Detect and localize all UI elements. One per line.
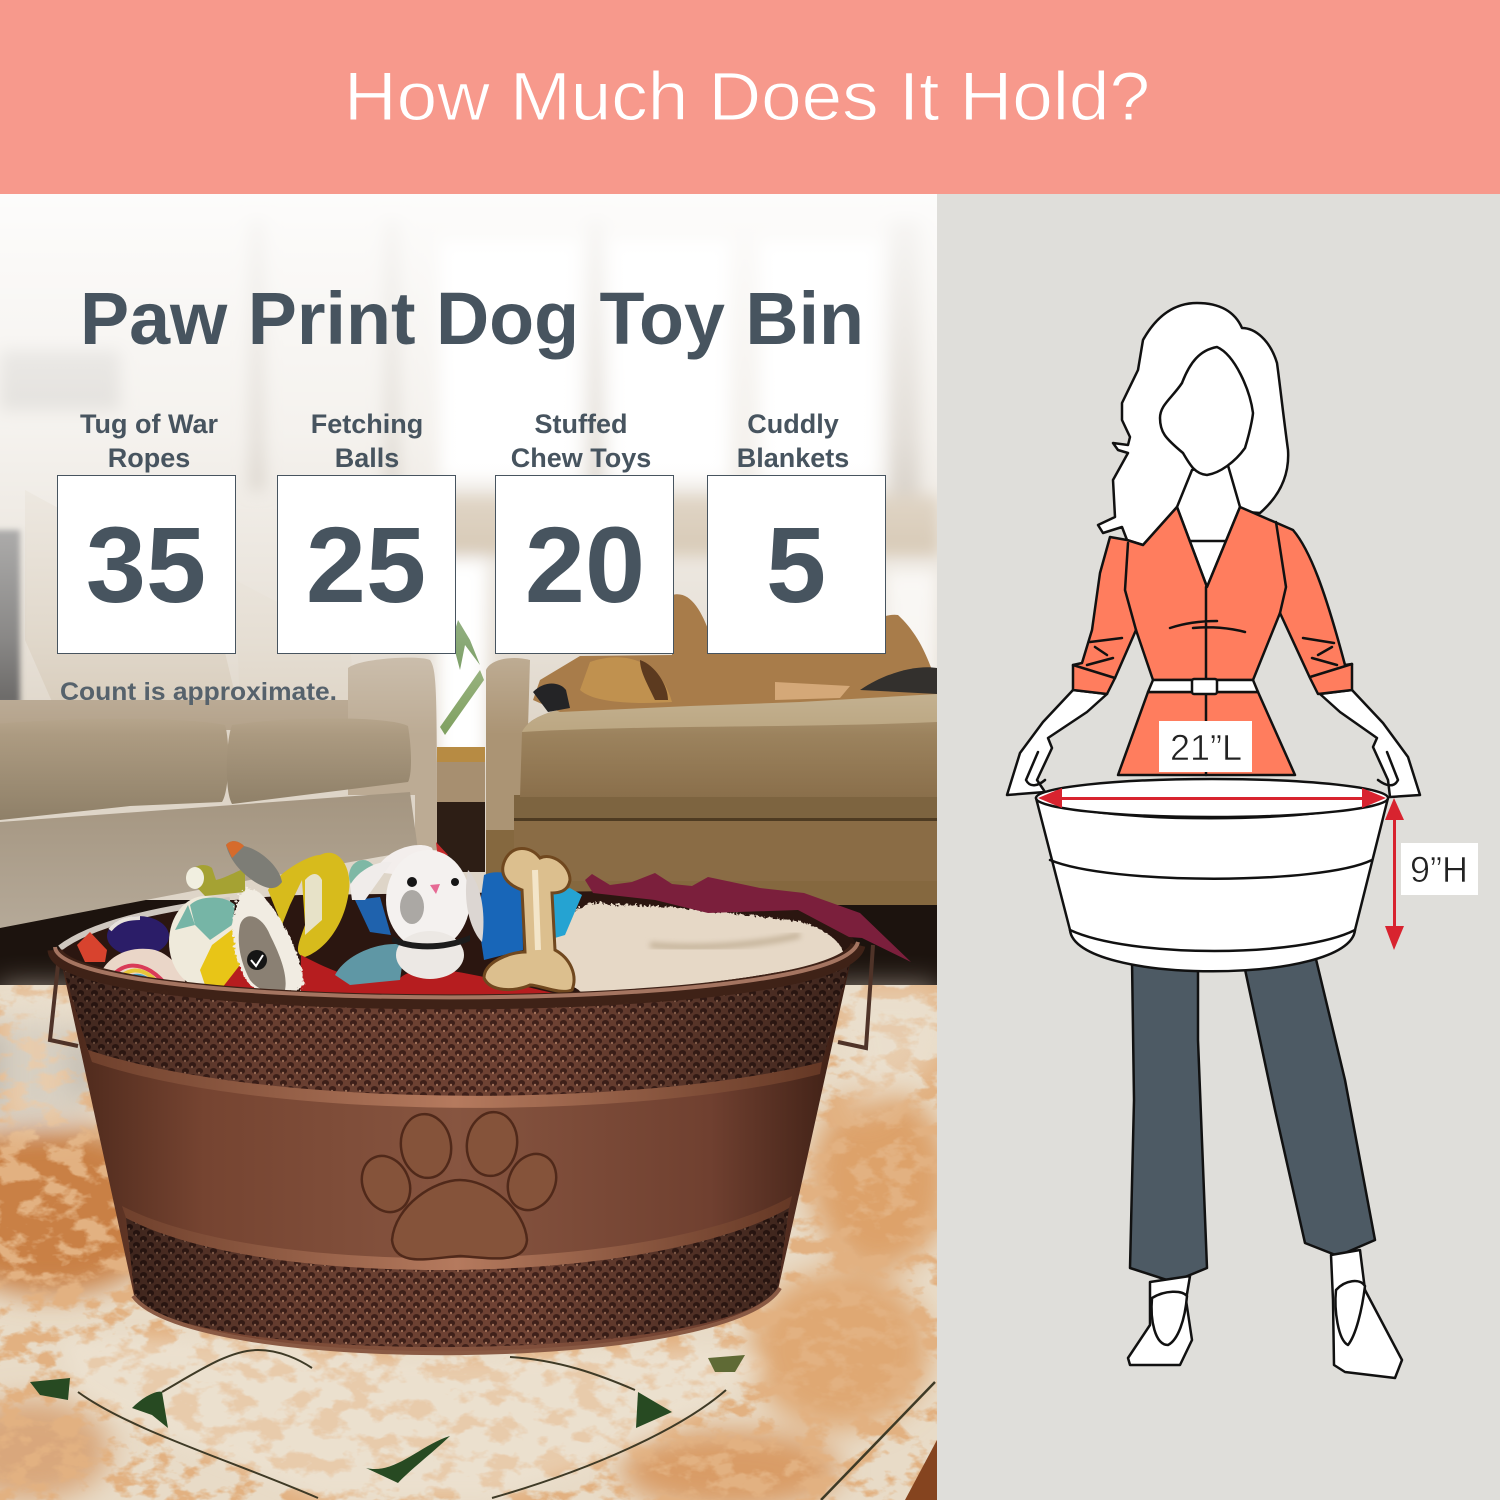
rug leaves	[30, 1355, 745, 1483]
stat: tug of war ropes: Ropes	[108, 443, 190, 473]
small balls	[77, 932, 107, 962]
white haze over the upper photo	[0, 194, 937, 739]
fur blanket	[550, 902, 845, 998]
sofa arm	[348, 658, 437, 850]
product heading: Paw Print Dog Toy Bin	[80, 277, 864, 360]
stat: stuffed chew toys: Chew Toys	[511, 443, 651, 473]
figure face	[1160, 347, 1253, 475]
figure: woman holding bin	[1007, 303, 1420, 1378]
photo panel: living room with dog toy bin	[0, 194, 950, 1500]
bunny plush	[350, 842, 483, 979]
toys	[77, 841, 911, 1005]
stat: fetching balls: Balls	[335, 443, 399, 473]
stat: tug of war ropes: Tug of War	[80, 409, 218, 439]
title: How Much Does It Hold?	[344, 58, 1150, 135]
footnote: Count is approximate.	[60, 678, 337, 706]
upper rib	[88, 1050, 822, 1108]
right sofa	[486, 658, 937, 905]
figure neck and shirt	[1177, 462, 1240, 587]
plant and pot	[437, 620, 485, 872]
grey squeaky toy	[226, 841, 282, 888]
rug cream medallion	[60, 1337, 770, 1498]
pillows	[25, 515, 236, 700]
21 inch length label: 21”L	[1170, 727, 1242, 768]
height arrow	[1385, 798, 1404, 950]
stat: stuffed chew toys: Stuffed	[535, 409, 627, 439]
base	[0, 792, 418, 928]
bone chew	[484, 848, 574, 991]
stat: tug of war ropes: 35	[86, 504, 206, 625]
tub interior	[57, 890, 857, 998]
rug	[0, 985, 950, 1500]
9 inch height label	[1401, 843, 1478, 895]
stat: cuddly blankets: Cuddly	[747, 409, 839, 439]
figure blouse	[1073, 507, 1352, 694]
21 inch length label	[1159, 721, 1252, 772]
lower hammered band	[126, 1208, 789, 1347]
stat: stuffed chew toys: 20	[525, 504, 645, 625]
embossed paw print	[353, 1109, 565, 1259]
cushions	[0, 730, 228, 820]
stat: stuffed chew toys	[496, 409, 674, 654]
rug orange pattern	[0, 985, 937, 1500]
mint toy	[349, 860, 374, 884]
background: right grey panel	[937, 194, 1500, 1500]
green toy	[186, 865, 245, 896]
header band	[0, 0, 1500, 194]
stat: fetching balls: Fetching	[311, 409, 423, 439]
rainbow toy	[103, 948, 186, 982]
figure hair	[1098, 303, 1288, 545]
9 inch height label: 9”H	[1410, 849, 1468, 890]
stat: fetching balls: 25	[306, 504, 426, 625]
figure arms and hands	[1007, 690, 1420, 797]
room wall and windows	[0, 219, 937, 900]
tub rim	[55, 945, 858, 1002]
upper hammered band	[62, 955, 852, 1096]
stat: tug of war ropes	[58, 409, 236, 654]
left sofa	[0, 490, 437, 928]
teal toy	[335, 944, 405, 985]
stat: fetching balls	[278, 409, 456, 654]
blue toys	[478, 872, 523, 960]
rug dark lines	[78, 1350, 935, 1500]
length arrow	[1038, 788, 1386, 808]
plush leg	[233, 888, 304, 994]
tub handles	[50, 945, 873, 1048]
figure belt	[1148, 680, 1258, 692]
yellow rope ring	[268, 853, 349, 957]
soccer ball	[169, 896, 235, 984]
back rim highlight	[60, 900, 230, 948]
lower rib	[122, 1196, 792, 1270]
maroon blanket	[585, 873, 911, 962]
tub body	[55, 942, 858, 1353]
blouse detail lines	[1073, 522, 1352, 775]
figure shoes	[1128, 1250, 1402, 1378]
stat: cuddly blankets: 5	[766, 504, 826, 625]
blouse skirt	[1118, 692, 1295, 775]
rug top cream	[0, 985, 937, 1130]
red rope toy	[300, 955, 552, 994]
stat: cuddly blankets	[708, 409, 886, 654]
figure legs	[1130, 955, 1375, 1282]
stat: cuddly blankets: Blankets	[737, 443, 849, 473]
dark floor behind rug	[0, 900, 937, 985]
bin illustration	[1036, 779, 1388, 971]
wood floor corner	[905, 1440, 937, 1500]
sleeping dog	[533, 594, 937, 712]
base line	[133, 1288, 780, 1353]
